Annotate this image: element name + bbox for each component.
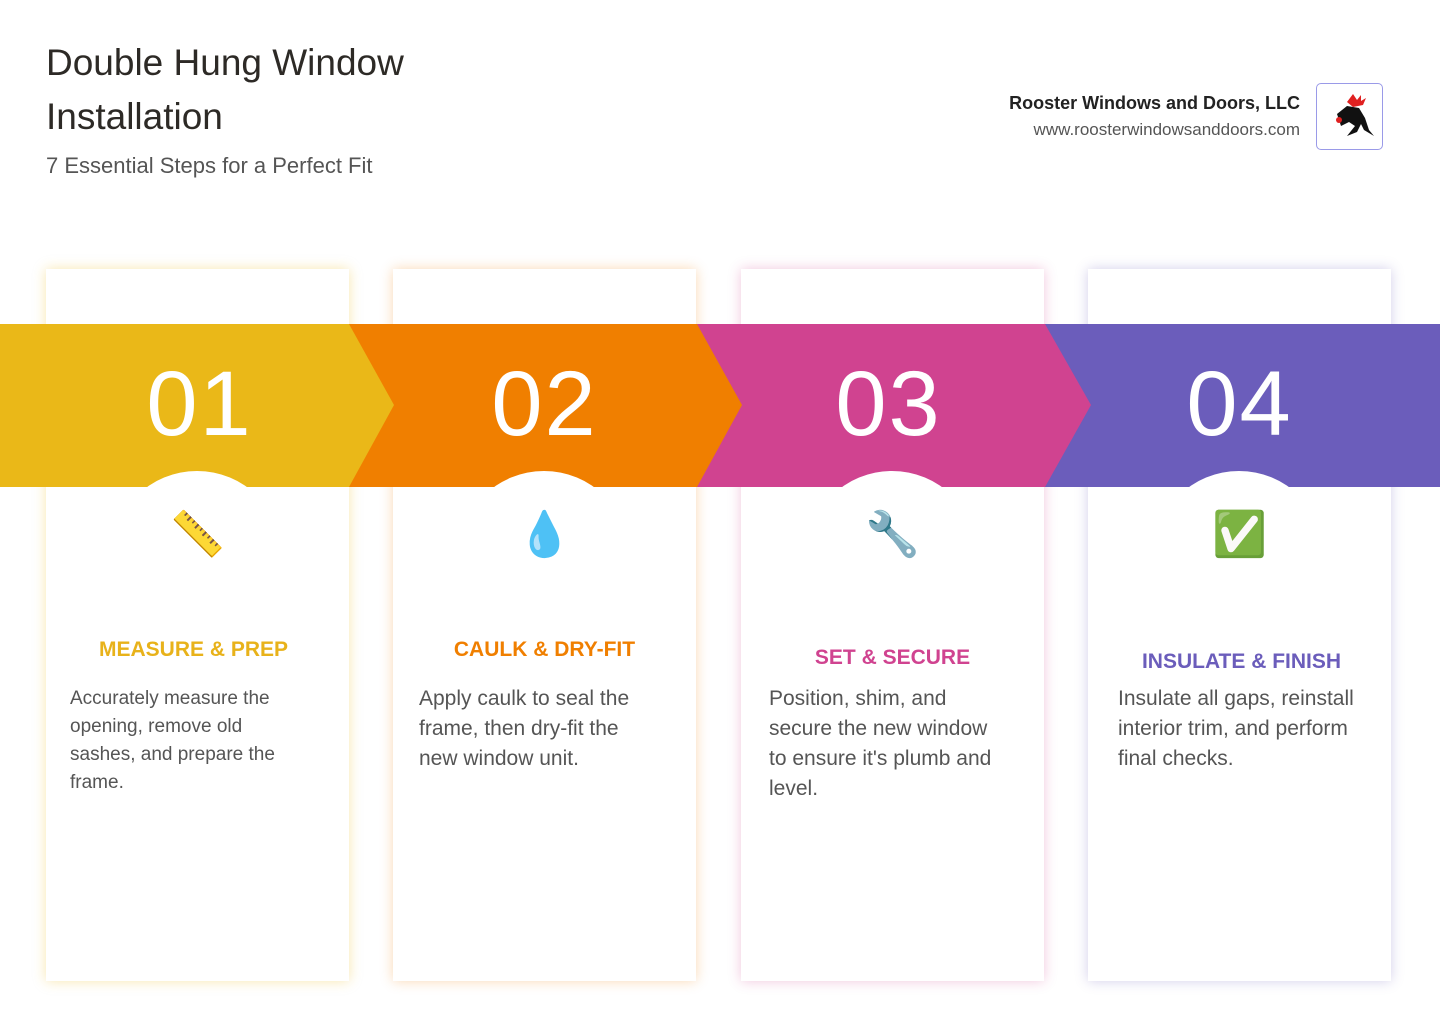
step 1 title: MEASURE & PREP (99, 638, 288, 661)
step 3 text: Position, shim, and secure the new window to ensure it's plumb and level. (769, 687, 991, 800)
step 4 title: INSULATE & FINISH (1142, 650, 1341, 673)
card 4 (1088, 269, 1391, 981)
subtitle: 7 Essential Steps for a Perfect Fit (46, 153, 372, 178)
icon: ruler: 📏 (170, 510, 225, 559)
step 2 text: Apply caulk to seal the frame, then dry-fit the new window unit. (419, 687, 629, 770)
company info: www.roosterwindowsanddoors.com (1034, 120, 1300, 139)
card 2 (393, 269, 696, 981)
step 2 title: CAULK & DRY-FIT (454, 638, 635, 661)
icon: check: ✅ (1212, 510, 1267, 559)
card 3 (741, 269, 1044, 981)
chevron band (0, 324, 1440, 487)
card 1 (46, 269, 349, 981)
title (46, 42, 404, 137)
step 1 text: Accurately measure the opening, remove old sashes, and prepare the frame. (70, 688, 275, 793)
text: 03 (835, 353, 942, 455)
logo (1316, 83, 1383, 150)
icon: drop: 💧 (517, 510, 572, 559)
title: Installation (46, 96, 223, 137)
text: 02 (491, 353, 598, 455)
company info (1009, 93, 1300, 139)
icon: wrench: 🔧 (865, 510, 920, 559)
icon circles (111, 471, 283, 643)
step 3 title: SET & SECURE (815, 646, 970, 669)
company info: Rooster Windows and Doors, LLC (1009, 93, 1300, 113)
title: Double Hung Window (46, 42, 404, 83)
step 4 text: Insulate all gaps, reinstall interior trim, and perform final checks. (1118, 687, 1354, 770)
text: 04 (1186, 353, 1293, 455)
numbers: 01 (146, 353, 253, 455)
